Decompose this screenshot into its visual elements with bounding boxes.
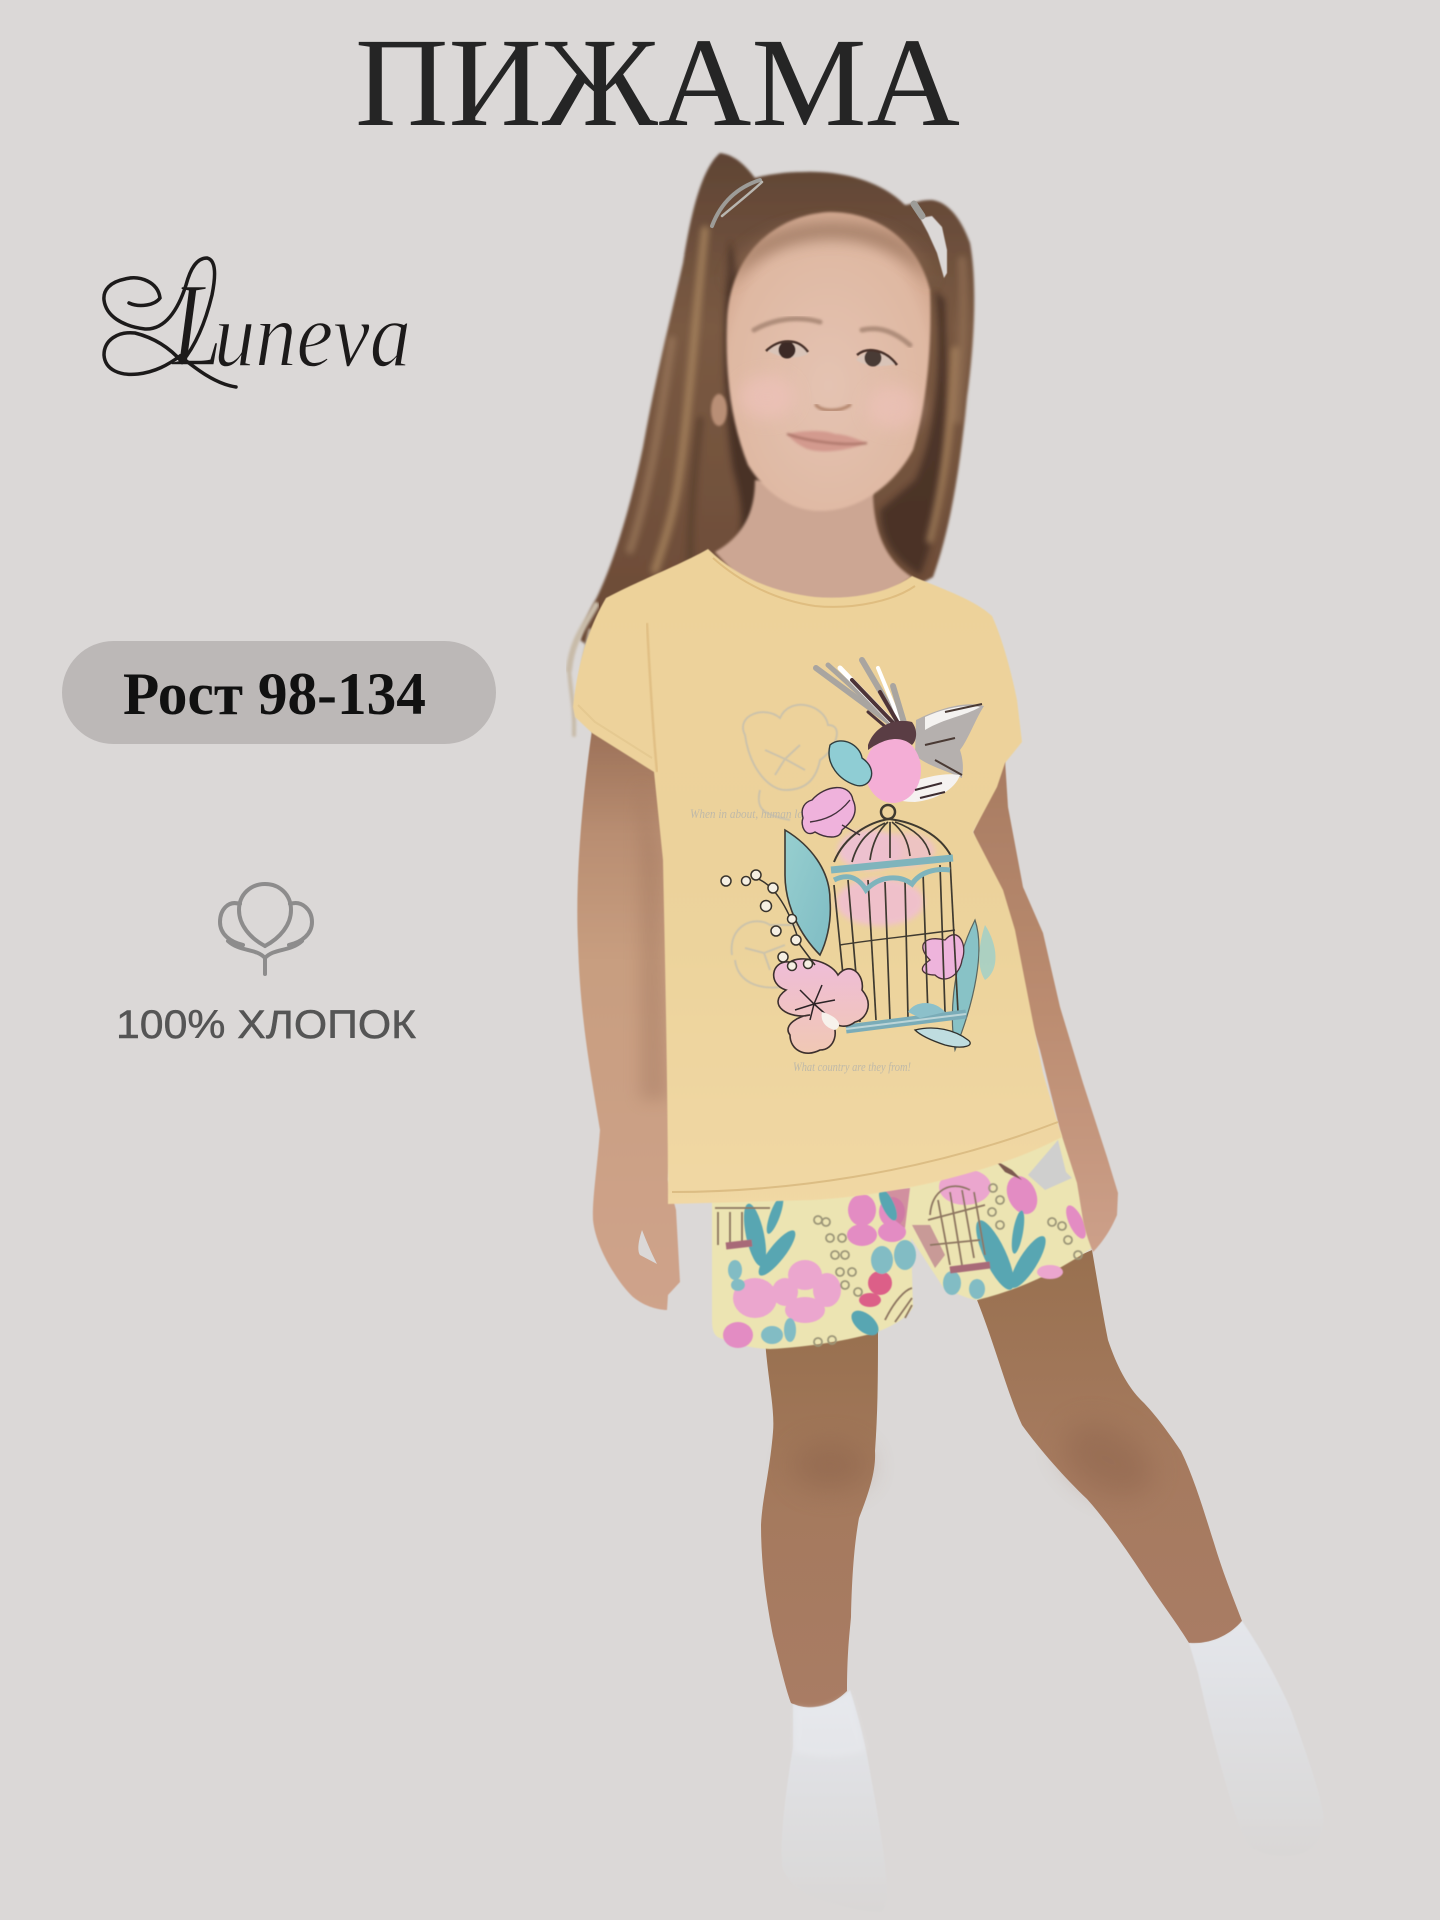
brand logo: Luneva	[104, 258, 411, 391]
ear left	[711, 394, 727, 426]
cheeks	[739, 375, 795, 419]
right arm and hand	[973, 760, 1118, 1252]
neck	[715, 480, 912, 604]
shorts: pale teal leaves	[728, 1240, 985, 1344]
hair ties	[712, 180, 922, 226]
t-shirt	[573, 549, 1062, 1204]
print: cage interior flower	[836, 878, 924, 926]
print: tall teal leaf	[785, 830, 830, 955]
pale hair wisps	[569, 605, 596, 735]
print: bird tail	[816, 660, 905, 735]
shorts with floral print	[712, 1130, 1092, 1349]
print: faint handwritten lines: When in about, human lo	[690, 806, 803, 821]
right sock	[1189, 1621, 1324, 1856]
face	[711, 212, 932, 511]
photo: girl in pyjamas	[569, 153, 1324, 1912]
shorts: teal leaves	[740, 1187, 1052, 1340]
eyebrows	[754, 319, 910, 345]
left eye	[766, 341, 808, 358]
title: ПИЖАМА	[355, 13, 960, 153]
material label: 100% ХЛОПОК	[116, 1003, 417, 1047]
print: bird wing	[915, 704, 984, 778]
shorts: bird cages	[715, 1186, 985, 1322]
mouth	[787, 431, 867, 451]
brand logo: Luneva: L	[171, 258, 222, 391]
shorts: pink flowers	[723, 1171, 1090, 1348]
nose	[816, 405, 850, 410]
height badge: Рост 98-134	[123, 661, 426, 727]
print: bird perched leaf	[829, 741, 872, 786]
right leg	[977, 1250, 1242, 1643]
shorts: light flowers	[733, 1169, 1063, 1323]
print: top pink flower	[802, 788, 860, 837]
print: white petals accent	[822, 1012, 839, 1030]
print: bottom leaf	[915, 1028, 970, 1047]
t-shirt print	[690, 660, 996, 1074]
gap between head and right ponytail	[920, 216, 947, 278]
print: ghost flowers	[732, 705, 837, 988]
left leg	[761, 1325, 878, 1708]
shorts: bird	[1028, 1140, 1072, 1190]
shorts: lily-of-the-valley chains	[814, 1184, 1082, 1346]
left arm and hand	[577, 730, 680, 1310]
print: large flower	[774, 959, 868, 1053]
print: small pink flower on cage	[922, 935, 964, 979]
print: cage base	[846, 1014, 966, 1029]
right eye	[856, 350, 897, 366]
print: large flower stamen	[795, 985, 835, 1020]
height badge	[62, 641, 496, 744]
print: right teal leaf	[952, 920, 979, 1050]
t-shirt print: What country are they from!	[793, 1059, 911, 1074]
print: bird body	[865, 721, 960, 803]
print: bird cage	[834, 805, 958, 1025]
print: lily of the valley	[721, 870, 815, 970]
left sock	[782, 1690, 887, 1912]
hair back	[580, 153, 974, 650]
print: cage band	[831, 858, 953, 870]
brand logo: Luneva: uneva	[214, 284, 411, 386]
hairline blend	[728, 223, 932, 285]
shorts: red flower	[859, 1271, 892, 1307]
icon: cotton boll	[220, 884, 312, 974]
